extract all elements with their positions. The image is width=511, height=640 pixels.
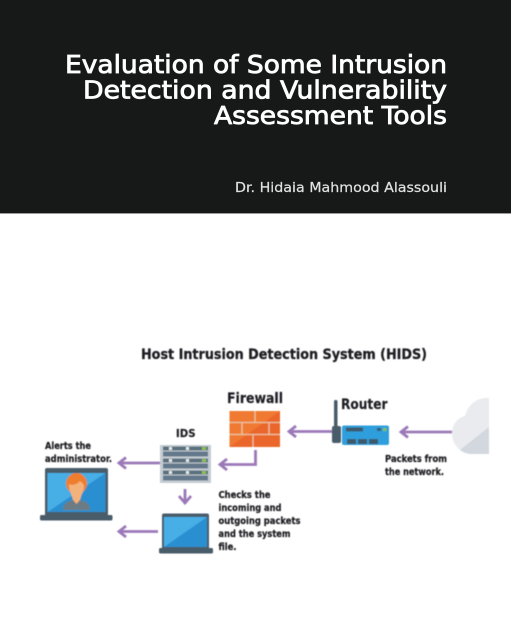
icon: IDS server xyxy=(160,445,211,483)
diagram heading: Host Intrusion Detection System (HIDS) xyxy=(141,347,427,363)
checks caption: Checks the xyxy=(218,490,270,501)
IDS label: IDS xyxy=(176,427,196,440)
arrow: laptop to administrator xyxy=(119,526,158,537)
arrow: IDS down to laptop xyxy=(179,489,191,503)
arrow: router to firewall xyxy=(289,426,332,437)
arrow: IDS to administrator xyxy=(119,458,160,468)
checks caption: and the system xyxy=(218,529,291,540)
icon: firewall xyxy=(230,411,280,447)
checks caption: file. xyxy=(218,542,236,553)
packets caption: the network. xyxy=(385,467,444,478)
checks caption xyxy=(218,490,301,553)
alerts caption xyxy=(45,441,112,465)
arrow: cloud to router xyxy=(401,426,452,438)
title: Detection and Vulnerability xyxy=(83,76,447,104)
packets caption: Packets from xyxy=(385,454,447,465)
checks caption: incoming and xyxy=(218,503,282,514)
HIDS diagram xyxy=(40,347,489,554)
firewall label: Firewall xyxy=(227,391,283,407)
title xyxy=(65,50,447,130)
alerts caption: administrator. xyxy=(45,454,112,465)
icon: cloud xyxy=(452,398,489,454)
title: Evaluation of Some Intrusion xyxy=(65,50,447,79)
author: Dr. Hidaia Mahmood Alassouli xyxy=(235,180,447,196)
arrow: firewall to IDS xyxy=(220,450,256,470)
router label: Router xyxy=(341,397,388,413)
checks caption: outgoing packets xyxy=(218,516,301,527)
title: Assessment Tools xyxy=(214,101,447,130)
icon: administrator laptop xyxy=(40,468,112,520)
dark title band xyxy=(0,0,511,214)
icon: system laptop xyxy=(159,514,213,554)
alerts caption: Alerts the xyxy=(45,441,91,452)
packets caption xyxy=(385,454,447,478)
icon: router xyxy=(332,400,389,445)
